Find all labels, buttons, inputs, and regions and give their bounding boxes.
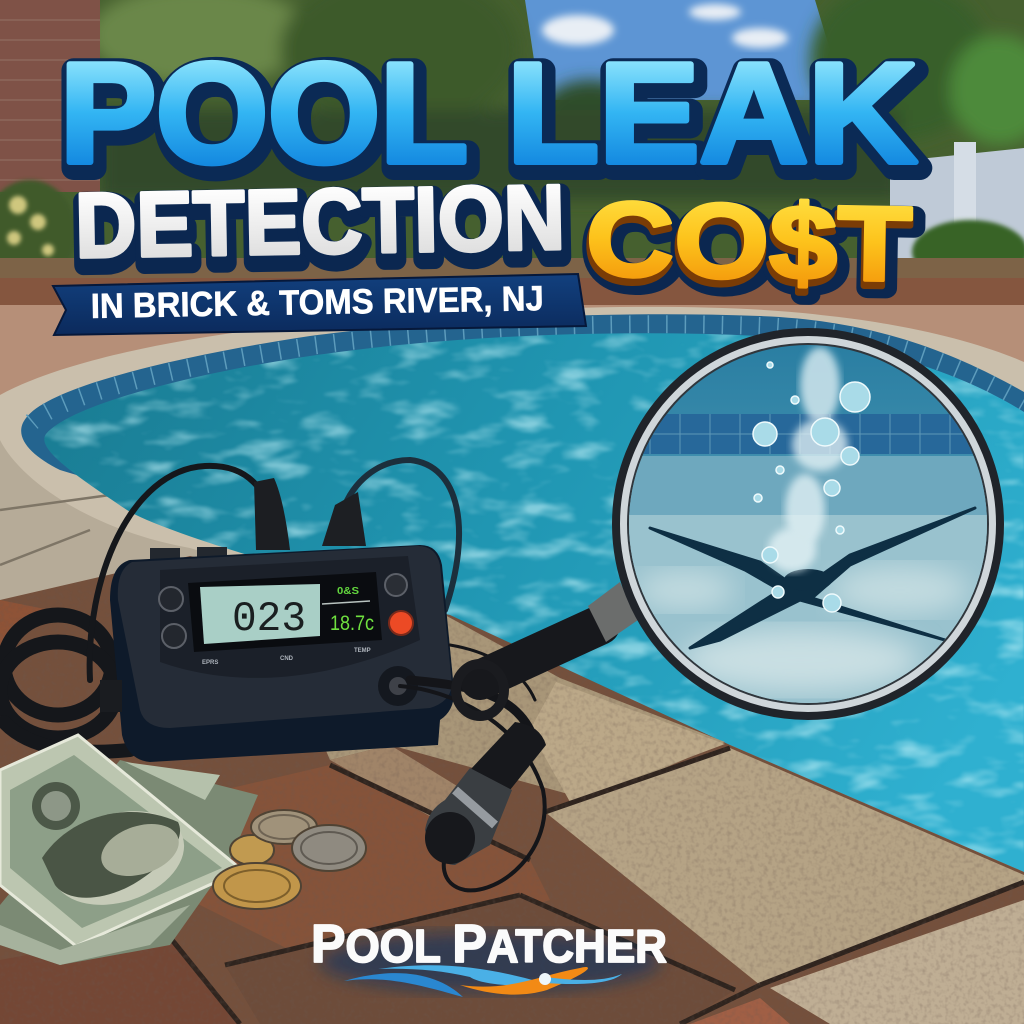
title line: Pool Leak: POOL [60, 34, 468, 193]
logo wave [344, 973, 463, 997]
icon: leak detector device [100, 478, 454, 762]
title line: Cost: CO$T [588, 188, 916, 312]
lens [629, 345, 987, 703]
sky [525, 0, 830, 100]
title [53, 34, 921, 335]
background: garden and sky [0, 0, 1024, 306]
title line: Cost: CO$T [584, 186, 912, 310]
icon: coins [213, 810, 366, 909]
patio and coping [0, 305, 1024, 1024]
stone: large coping [545, 748, 1024, 985]
sensor plugs on top [254, 478, 290, 550]
tiny labels: EPRS [202, 660, 218, 666]
cable coil [0, 460, 459, 752]
icon: cash [0, 735, 258, 965]
fence [890, 148, 1024, 282]
pool water [0, 314, 1024, 880]
display [188, 572, 382, 652]
back ground strip [0, 258, 1024, 282]
title line: Pool Leak [60, 34, 921, 199]
brick building [0, 0, 100, 192]
logo: Pool Patcher [311, 914, 667, 997]
tiny labels [202, 648, 371, 666]
icon: magnifying glass [456, 332, 1000, 716]
display small reading: 0&S [337, 586, 359, 597]
temperature reading: 18.7c [330, 612, 374, 635]
title line: Pool Leak: LEAK [511, 40, 921, 199]
ring [616, 332, 1000, 716]
housing [110, 545, 454, 762]
banner: IN BRICK & TOMS RIVER, NJ [90, 279, 544, 326]
crack [650, 508, 975, 648]
title line: Detection: DETECTION [76, 175, 568, 285]
title line: Detection: DETECTION [74, 167, 566, 277]
tiny labels: TEMP [354, 648, 371, 654]
bushes [0, 180, 76, 284]
title line: Pool Leak: LEAK [507, 34, 917, 193]
buttons [159, 574, 413, 648]
trees [90, 0, 1024, 200]
bubbles [768, 347, 848, 572]
bricks [180, 765, 550, 970]
stone: near pool [300, 615, 725, 800]
logo wordmark: POOL PATCHER [311, 914, 667, 974]
icon: probe cable and sensor [400, 645, 546, 890]
handle [480, 625, 600, 680]
title line: Cost: CO$T [585, 180, 913, 304]
tiny labels: CND [280, 656, 294, 662]
foreground pavers [0, 540, 1024, 1024]
tile band in lens [643, 414, 973, 454]
title line: Pool Leak: POOL [64, 40, 472, 199]
display reading: 023 [232, 595, 306, 643]
connector [378, 666, 418, 706]
